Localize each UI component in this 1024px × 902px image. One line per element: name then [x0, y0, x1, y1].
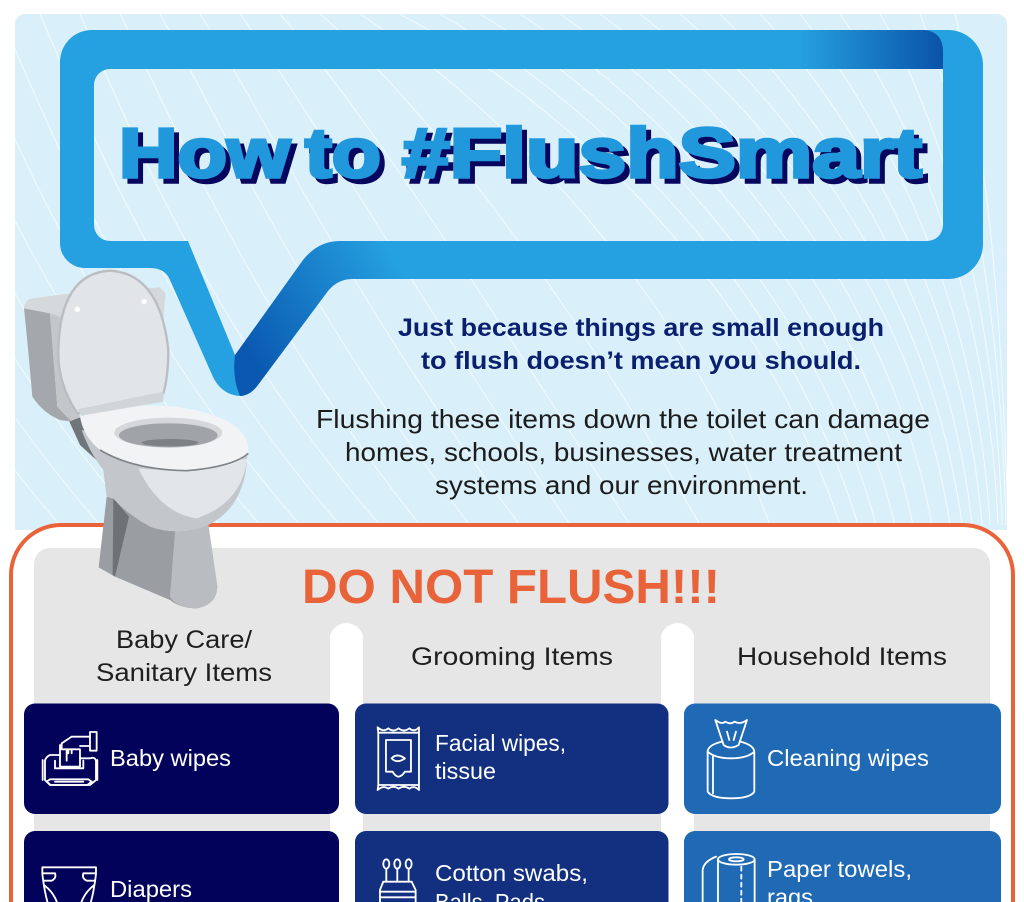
- card: diapers: Diapers: [110, 876, 192, 902]
- speech bubble: [60, 30, 983, 396]
- title: [119, 114, 927, 197]
- card: baby wipes: [24, 704, 339, 814]
- subheading: [398, 314, 884, 375]
- card: diapers: [24, 831, 339, 902]
- title: #FlushSmart: [407, 119, 927, 197]
- title: How: [119, 114, 291, 192]
- pedestal: [99, 497, 217, 608]
- card: baby wipes: Baby wipes: [110, 745, 231, 771]
- neck: [69, 417, 100, 463]
- title: How: [124, 119, 296, 197]
- column header: baby care: Sanitary Items: [96, 659, 272, 687]
- icon: cleaning wipes: [708, 720, 754, 798]
- icon: diapers: [42, 867, 96, 902]
- seat: [80, 406, 248, 471]
- card: facial wipes: tissue: [435, 758, 496, 784]
- icon: facial wipes: [378, 727, 419, 790]
- icon: paper towels: [703, 854, 755, 902]
- bowl: [82, 430, 247, 531]
- intro text: [316, 404, 930, 500]
- subheading: to flush doesn’t mean you should.: [421, 347, 861, 375]
- card: facial wipes: [355, 704, 668, 814]
- background panel: [0, 14, 1008, 530]
- panel: do not flush: [11, 525, 1013, 902]
- intro text: Flushing these items down the toilet can damage: [316, 404, 930, 434]
- card: cleaning wipes: Cleaning wipes: [767, 745, 929, 771]
- column header: baby care: [96, 626, 272, 687]
- column header: household: Household Items: [737, 643, 947, 671]
- intro text: systems and our environment.: [435, 470, 808, 500]
- icon: toilet: [24, 271, 248, 608]
- heading: do not flush: DO NOT FLUSH!!!: [302, 561, 720, 614]
- title: to: [310, 119, 386, 197]
- lid: [58, 271, 168, 416]
- column header: grooming: Grooming Items: [411, 643, 613, 671]
- icon: baby wipes: [43, 732, 97, 785]
- icon: cotton swabs: [380, 859, 416, 902]
- title: to: [305, 114, 381, 192]
- intro text: homes, schools, businesses, water treatment: [345, 437, 903, 467]
- tank: [24, 287, 166, 422]
- subheading: Just because things are small enough: [398, 314, 884, 342]
- card: paper towels: [684, 831, 1001, 902]
- column header: baby care: Baby Care/: [116, 626, 252, 654]
- card: facial wipes: Facial wipes,: [435, 730, 566, 756]
- card: cleaning wipes: [684, 704, 1001, 814]
- card: cotton swabs: [355, 831, 668, 902]
- card: cotton swabs: Cotton swabs,: [435, 860, 588, 886]
- card: paper towels: Paper towels,: [767, 856, 912, 882]
- title: #FlushSmart: [402, 114, 922, 192]
